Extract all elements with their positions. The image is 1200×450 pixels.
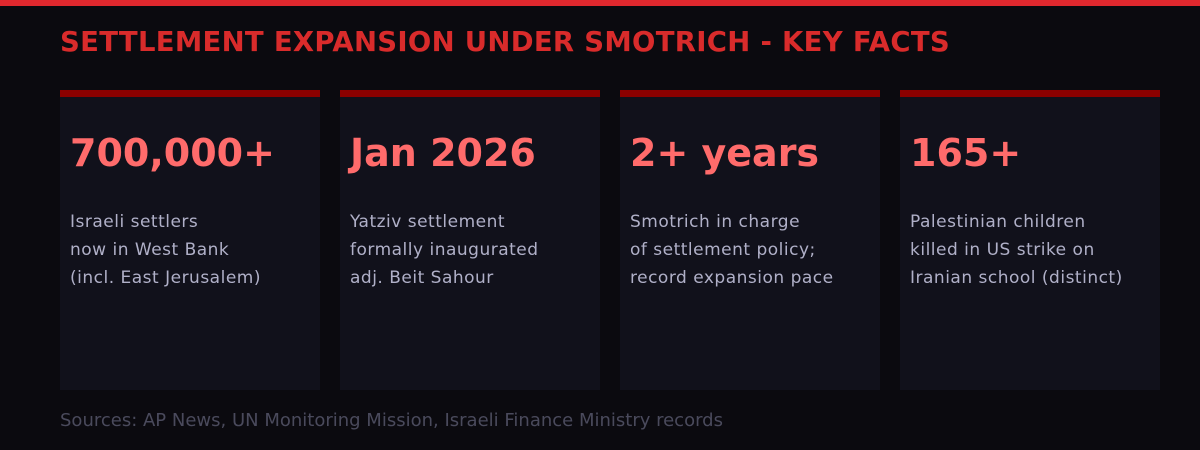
text: Smotrich: of settlement policy;: [630, 240, 816, 260]
stat: date: Jan 2026: [350, 131, 536, 175]
text: Yatziv: adj. Beit Sahour: [350, 268, 494, 288]
text: children: [910, 212, 1123, 288]
sources: Sources: AP News, UN Monitoring Mission, Israeli Finance Ministry records: [60, 410, 723, 431]
stat: years: 2+ years: [630, 131, 819, 175]
text: children: Iranian school (distinct): [910, 268, 1123, 288]
panel: Yatziv: [340, 90, 600, 390]
text: children: Palestinian children: [910, 212, 1086, 232]
stat: children: 165+: [910, 131, 1021, 175]
text: Smotrich: record expansion pace: [630, 268, 834, 288]
panel: settlers: [60, 90, 320, 390]
text: settlers: (incl. East Jerusalem): [70, 268, 261, 288]
stat: settlers: 700,000+: [70, 131, 275, 175]
panel: Smotrich: [620, 90, 880, 390]
text: settlers: Israeli settlers: [70, 212, 198, 232]
text: Smotrich: Smotrich in charge: [630, 212, 800, 232]
text: children: killed in US strike on: [910, 240, 1095, 260]
text: Yatziv: Yatziv settlement: [350, 212, 505, 232]
text: Yatziv: [350, 212, 539, 288]
text: settlers: now in West Bank: [70, 240, 229, 260]
text: Yatziv: formally inaugurated: [350, 240, 539, 260]
panel: children: [900, 90, 1160, 390]
title: SETTLEMENT EXPANSION UNDER SMOTRICH - KEY FACTS: [60, 26, 950, 58]
text: Smotrich: [630, 212, 834, 288]
text: settlers: [70, 212, 261, 288]
